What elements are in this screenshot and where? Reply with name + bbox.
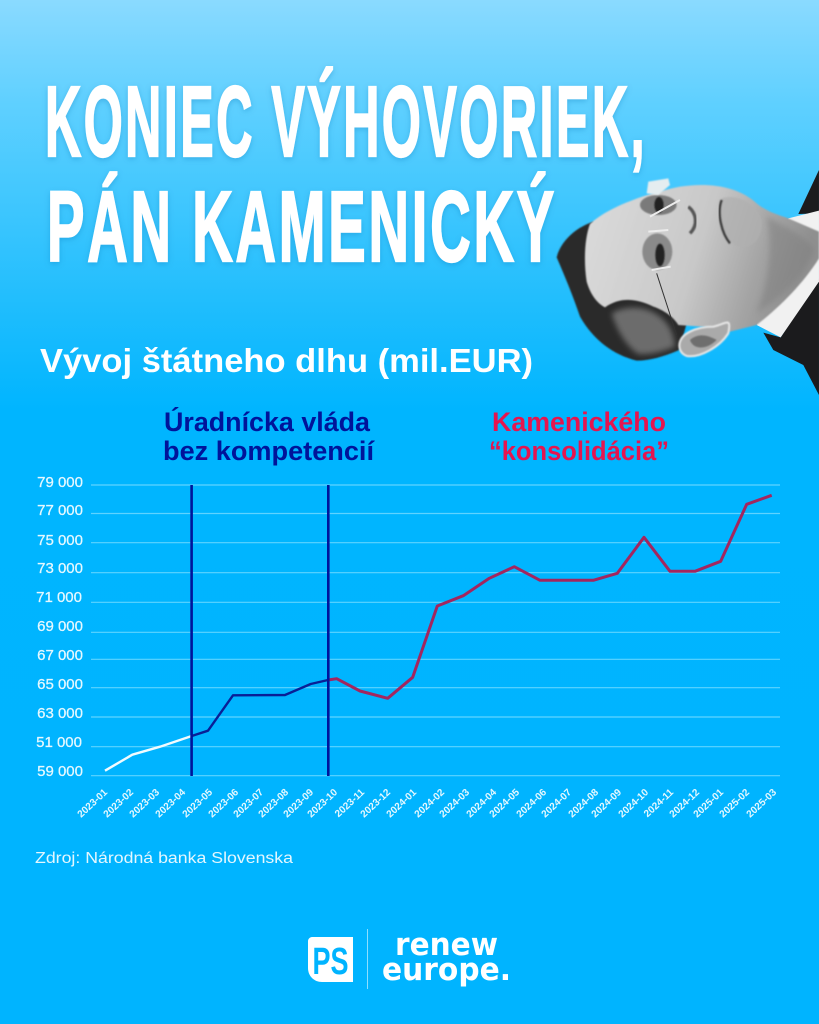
x axis labels: 2024-09 <box>590 787 624 820</box>
x axis labels: 2023-04 <box>154 787 188 820</box>
x axis labels: 2023-01 <box>76 787 110 820</box>
y axis labels: 79 000 <box>37 474 83 491</box>
y axis labels: 71 000 <box>36 589 82 606</box>
suit lower <box>763 278 819 395</box>
x axis labels: 2023-11 <box>333 787 367 820</box>
nostril <box>688 207 695 233</box>
line chart <box>36 474 780 820</box>
label: Kamenický consolidation <box>489 407 669 466</box>
label: Kamenický consolidation: “konsolidácia” <box>489 436 669 466</box>
x axis labels: 2023-09 <box>282 787 316 820</box>
neck shadow <box>757 217 815 313</box>
x axis labels: 2023-12 <box>359 787 393 820</box>
label: caretaker government: bez kompetencií <box>163 436 375 466</box>
x axis labels: 2024-12 <box>668 787 702 820</box>
x axis labels: 2024-07 <box>540 787 574 820</box>
face and neck <box>585 185 819 332</box>
vertical marker: end of caretaker government <box>327 485 330 776</box>
inner ear <box>690 335 717 347</box>
nose <box>720 197 762 247</box>
x axis labels: 2023-08 <box>257 787 291 820</box>
x axis labels: 2024-02 <box>413 787 447 820</box>
nose crease <box>720 200 730 243</box>
eyes <box>640 195 677 215</box>
logo: renew europe <box>382 927 511 988</box>
vertical marker: start of caretaker government <box>190 485 193 776</box>
y axis labels: 75 000 <box>37 532 83 549</box>
shirt collar <box>757 211 819 337</box>
label: caretaker government: Úradnícka vláda <box>164 406 371 437</box>
logo divider <box>367 929 368 989</box>
grid lines <box>91 485 780 776</box>
x axis labels: 2025-03 <box>745 787 779 820</box>
x axis labels: 2024-10 <box>617 787 651 820</box>
chart subtitle: Vývoj štátneho dlhu (mil.EUR) <box>40 342 533 379</box>
x axis labels: 2023-07 <box>232 787 266 820</box>
x axis labels: 2025-01 <box>692 787 726 820</box>
x axis labels: 2023-06 <box>207 787 241 820</box>
y axis labels: 67 000 <box>37 647 83 664</box>
x axis labels: 2025-02 <box>718 787 752 820</box>
y axis labels <box>36 474 83 780</box>
logo: PS <box>308 937 353 983</box>
y axis labels: 77 000 <box>37 502 83 519</box>
y axis labels: 59 000 <box>37 763 83 780</box>
title <box>45 66 647 283</box>
x axis labels: 2024-01 <box>385 787 419 820</box>
photo: man's head rotated sideways <box>557 170 819 395</box>
x axis labels: 2023-02 <box>102 787 136 820</box>
suit upper <box>798 170 819 214</box>
y axis labels: 65 000 <box>37 676 83 693</box>
series: Kamenický <box>328 495 772 698</box>
ear <box>679 322 729 356</box>
x axis labels: 2024-06 <box>515 787 549 820</box>
y axis labels: 69 000 <box>37 618 83 635</box>
beard stubble <box>612 308 675 354</box>
x axis labels <box>76 787 779 820</box>
x axis labels: 2023-03 <box>128 787 162 820</box>
x axis labels: 2024-08 <box>567 787 601 820</box>
source: Zdroj: Národná banka Slovenska <box>35 850 293 867</box>
x axis labels: 2024-04 <box>465 787 499 820</box>
glasses <box>647 178 670 195</box>
y axis labels: 51 000 <box>36 734 82 751</box>
x axis labels: 2023-10 <box>306 787 340 820</box>
x axis labels: 2024-11 <box>642 787 676 820</box>
label: caretaker government <box>163 406 375 466</box>
x axis labels: 2024-03 <box>438 787 472 820</box>
logo: renew europe: renew <box>395 927 498 963</box>
y axis labels: 73 000 <box>37 560 83 577</box>
hair and beard base <box>557 222 687 361</box>
y axis labels: 63 000 <box>37 705 83 722</box>
logo: PS: PS <box>312 941 348 983</box>
x axis labels: 2024-05 <box>488 787 522 820</box>
logo: renew europe: europe. <box>382 952 511 988</box>
series: caretaker government <box>192 680 328 736</box>
glasses arm <box>657 273 677 335</box>
label: Kamenický consolidation: Kamenického <box>492 407 666 437</box>
x axis labels: 2023-05 <box>181 787 215 820</box>
glasses rims <box>648 200 680 270</box>
series: before caretaker government <box>105 736 192 771</box>
